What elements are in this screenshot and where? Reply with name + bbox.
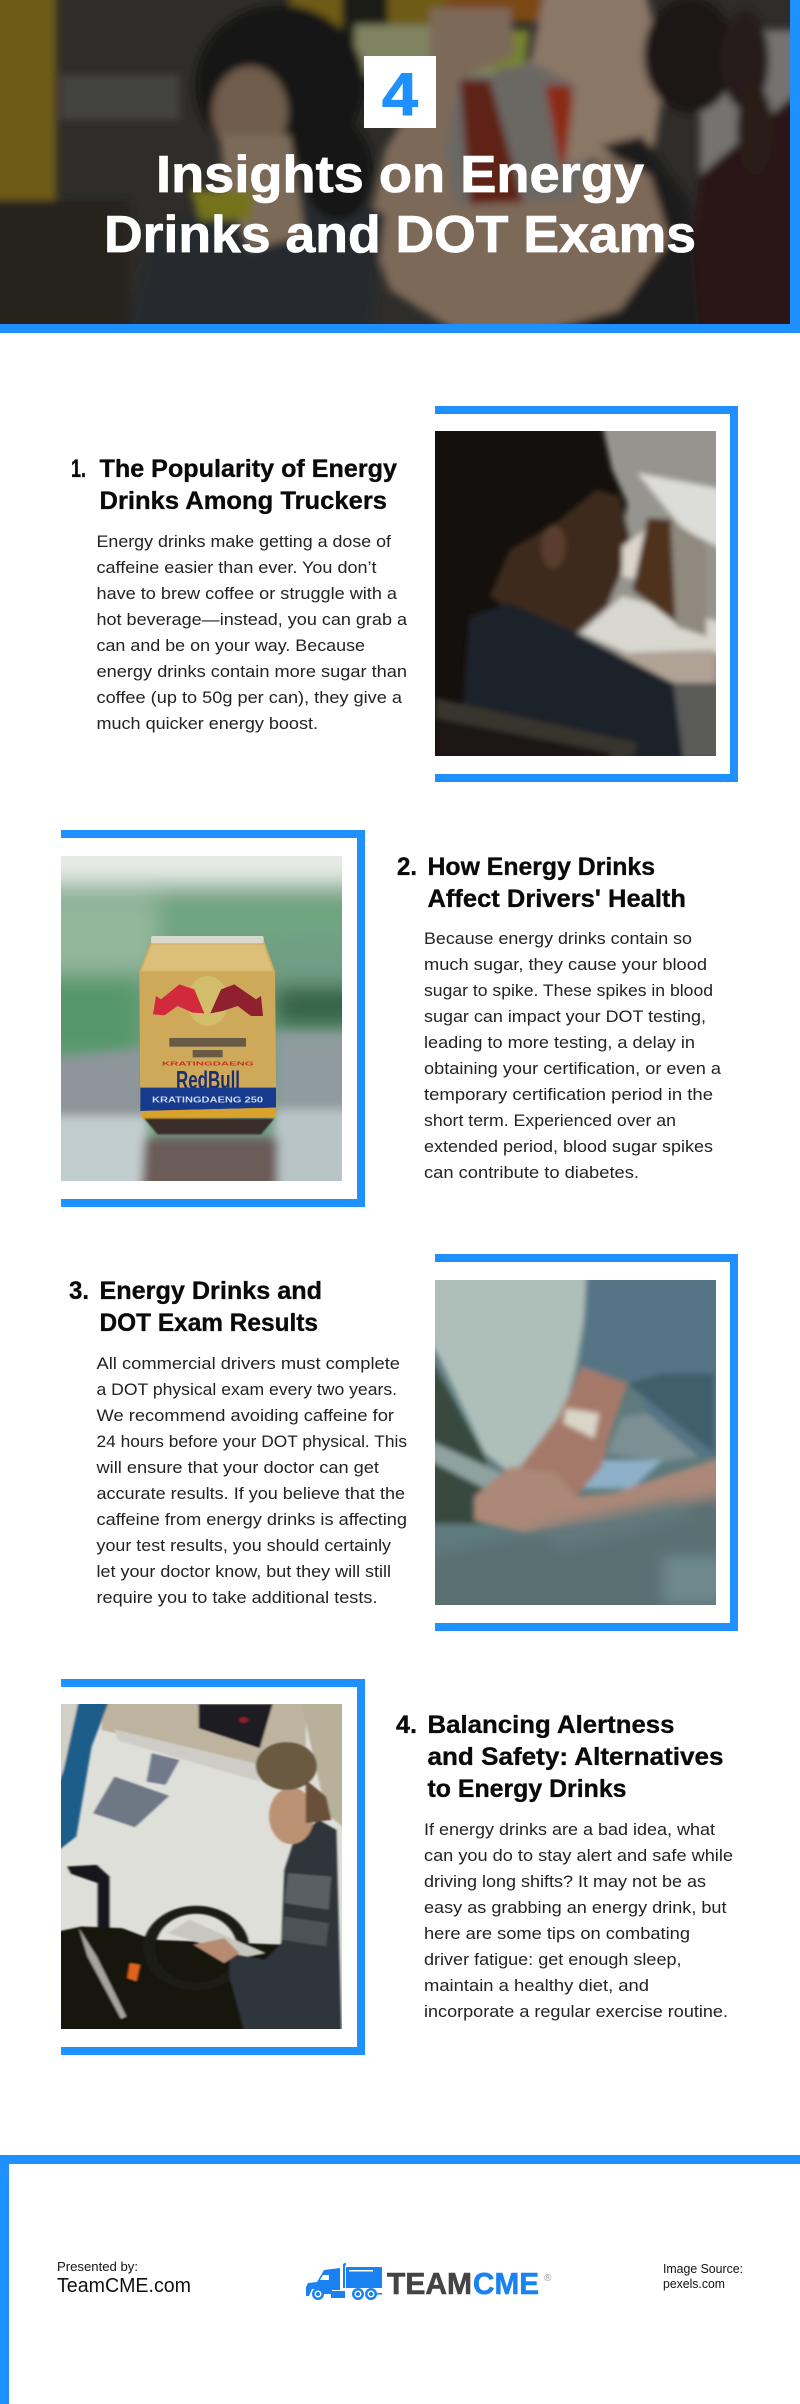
presented by credit <box>57 2259 191 2297</box>
bottom accent bar <box>0 324 800 333</box>
body text: require you to take additional tests. <box>96 1588 378 1607</box>
panel: section 4 alternatives <box>51 1683 733 2051</box>
body text: If energy drinks are a bad idea, what <box>424 1820 715 1839</box>
heading: The Popularity of Energy <box>100 455 397 483</box>
image source credit: Image Source: <box>663 2261 743 2276</box>
body text <box>96 532 408 733</box>
panel: section 2 health <box>34 829 722 1203</box>
photo: gold energy drink can on a table <box>61 856 342 1181</box>
body text: caffeine from energy drinks is affecting <box>96 1510 407 1529</box>
footer left bar <box>0 2155 9 2404</box>
body text: accurate results. If you believe that the <box>96 1484 405 1503</box>
body text: here are some tips on combating <box>424 1924 690 1943</box>
presented by credit: TeamCME.com <box>57 2275 191 2297</box>
body text: have to brew coffee or struggle with a <box>96 584 398 603</box>
heading: 3. <box>69 1277 89 1305</box>
panel: section 1 popularity <box>71 410 734 778</box>
title: Drinks and DOT Exams <box>104 206 696 264</box>
wordmark: CME <box>473 2266 539 2301</box>
photo: man drinking from a cup in a truck <box>435 431 716 756</box>
wordmark: TEAM <box>387 2266 472 2301</box>
body text: temporary certification period in the <box>424 1085 713 1104</box>
body text <box>424 929 722 1182</box>
wordmark <box>387 2266 552 2301</box>
photo: truck driver in cab reading a tablet <box>61 1704 342 2029</box>
header photo: two people drinking from bottles, darkened <box>0 0 790 324</box>
heading: 2. <box>397 853 417 881</box>
body text: coffee (up to 50g per can), they give a <box>96 688 403 707</box>
body text: can contribute to diabetes. <box>424 1163 639 1182</box>
heading <box>396 1711 724 1803</box>
body text: leading to more testing, a delay in <box>424 1033 695 1052</box>
image source credit: pexels.com <box>663 2276 725 2291</box>
title: Insights on Energy <box>156 146 644 204</box>
can <box>139 936 276 1134</box>
body text: 24 hours before your DOT physical. This <box>96 1432 407 1451</box>
heading: and Safety: Alternatives <box>428 1743 724 1771</box>
heading: DOT Exam Results <box>100 1309 318 1337</box>
number badge: 4 <box>382 61 419 128</box>
heading <box>397 853 686 913</box>
can: RedBull <box>176 1066 240 1094</box>
frame <box>61 1683 361 2051</box>
body text: will ensure that your doctor can get <box>95 1458 379 1477</box>
body text: sugar to spike. These spikes in blood <box>424 981 713 1000</box>
heading <box>71 455 397 515</box>
logo: TeamCME truck and wordmark <box>306 2263 552 2301</box>
footer top bar <box>0 2155 800 2164</box>
frame <box>435 1258 734 1627</box>
heading: Affect Drivers' Health <box>428 885 686 913</box>
body text: incorporate a regular exercise routine. <box>424 2002 728 2021</box>
photo: hands holding an arm with an IV line <box>435 1280 716 1605</box>
body text <box>95 1354 407 1607</box>
body text: driver fatigue: get enough sleep, <box>424 1950 682 1969</box>
heading: How Energy Drinks <box>428 853 655 881</box>
body text: extended period, blood sugar spikes <box>424 1137 713 1156</box>
heading: to Energy Drinks <box>428 1775 626 1803</box>
can: KRATINGDAENG <box>162 1062 255 1068</box>
heading: 1. <box>71 455 86 483</box>
body text: can and be on your way. Because <box>96 636 365 655</box>
body text: caffeine easier than ever. You don’t <box>96 558 377 577</box>
footer <box>0 2155 800 2404</box>
heading <box>69 1277 322 1337</box>
body text: much sugar, they cause your blood <box>424 955 707 974</box>
body text: All commercial drivers must complete <box>96 1354 400 1373</box>
header banner <box>0 0 800 340</box>
body text: sugar can impact your DOT testing, <box>424 1007 706 1026</box>
icon: blue truck <box>306 2263 382 2300</box>
body text <box>424 1820 733 2021</box>
presented by credit: Presented by: <box>57 2259 138 2274</box>
body text: maintain a healthy diet, and <box>424 1976 649 1995</box>
body text: a DOT physical exam every two years. <box>96 1380 397 1399</box>
title <box>104 146 696 264</box>
body text: Because energy drinks contain so <box>424 929 692 948</box>
body text: easy as grabbing an energy drink, but <box>424 1898 727 1917</box>
body text: We recommend avoiding caffeine for <box>96 1406 394 1425</box>
body text: short term. Experienced over an <box>424 1111 676 1130</box>
body text: Energy drinks make getting a dose of <box>96 532 391 551</box>
heading: Balancing Alertness <box>428 1711 674 1739</box>
body text: hot beverage—instead, you can grab a <box>96 610 408 629</box>
can: KRATINGDAENG 250 <box>152 1095 264 1104</box>
frame <box>435 410 734 778</box>
body text: can you do to stay alert and safe while <box>424 1846 733 1865</box>
heading: Energy Drinks and <box>100 1277 322 1305</box>
panel: section 3 exam results <box>69 1258 734 1627</box>
wordmark: ® <box>544 2273 552 2284</box>
body text: driving long shifts? It may not be as <box>424 1872 706 1891</box>
heading: 4. <box>396 1711 417 1739</box>
image source credit <box>663 2261 743 2291</box>
body text: obtaining your certification, or even a <box>424 1059 722 1078</box>
body text: much quicker energy boost. <box>96 714 318 733</box>
number badge <box>364 56 436 128</box>
body text: your test results, you should certainly <box>96 1536 392 1555</box>
right accent bar <box>790 0 800 333</box>
frame <box>61 834 361 1203</box>
body text: let your doctor know, but they will still <box>96 1562 391 1581</box>
heading: Drinks Among Truckers <box>100 487 387 515</box>
body text: energy drinks contain more sugar than <box>96 662 407 681</box>
